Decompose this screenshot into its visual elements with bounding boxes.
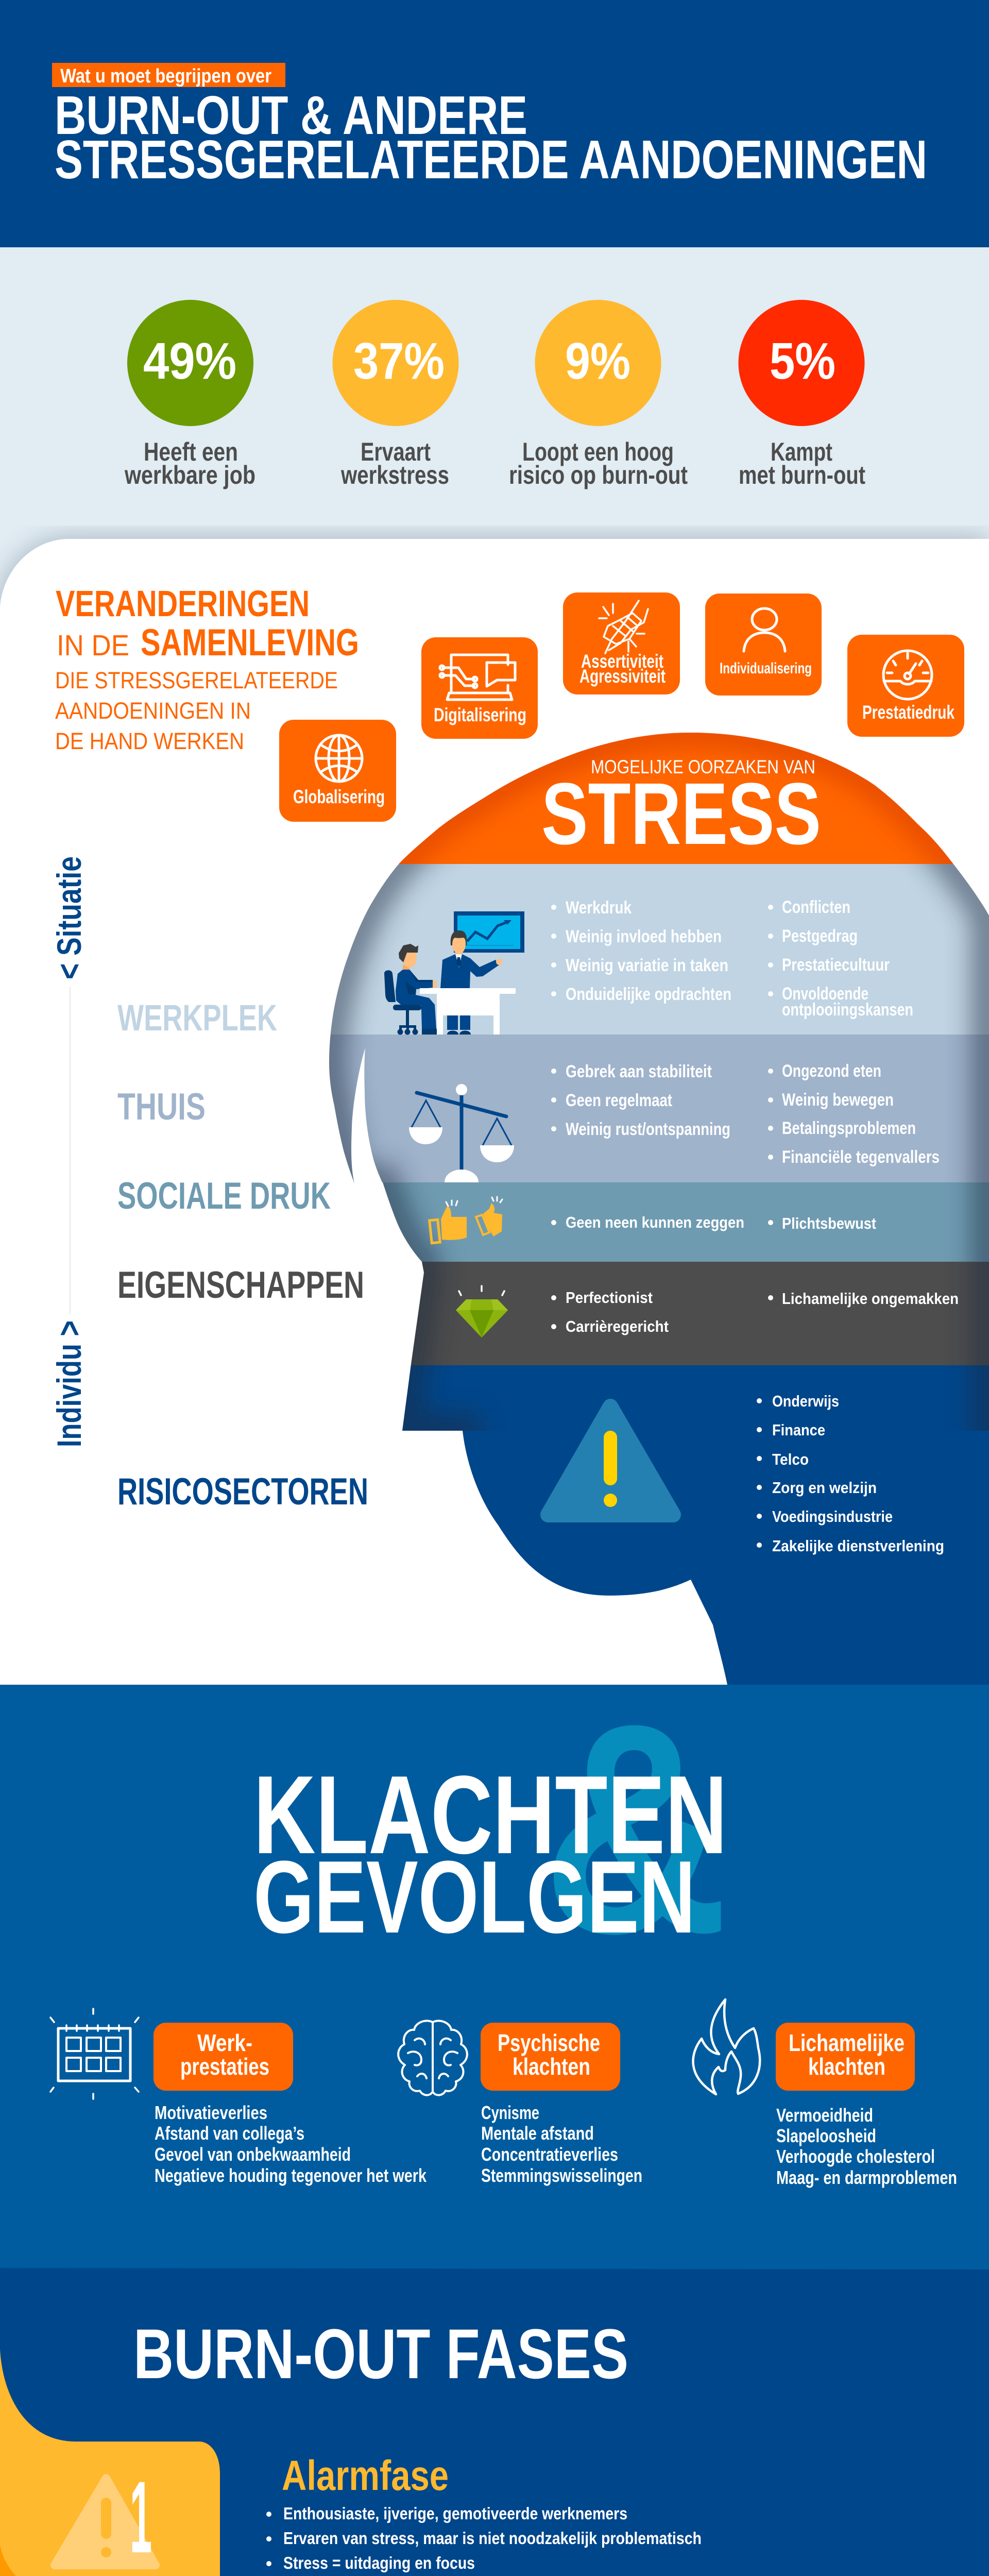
list: werkplek causes: Weinig variatie in taken bbox=[566, 956, 728, 975]
tile: digitalisering: Digitalisering bbox=[434, 704, 526, 725]
list: eigenschappen causes: Perfectionist bbox=[566, 1289, 653, 1307]
list: werkplek causes: Weinig invloed hebben bbox=[566, 927, 722, 946]
phase 1 text: Enthousiaste, ijverige, gemotiveerde werknemers bbox=[283, 2504, 627, 2523]
heading: klachten gevolgen: KLACHTEN bbox=[253, 1752, 727, 1877]
list: thuis causes: Financiële tegenvallers bbox=[782, 1147, 940, 1167]
phase 1 tab bbox=[0, 2349, 220, 2576]
phase 1 text bbox=[266, 2452, 702, 2572]
list: eigenschappen causes: Carrièregericht bbox=[566, 1317, 669, 1335]
stat: 9 percent bbox=[509, 300, 688, 489]
seated man and chair bbox=[384, 944, 437, 1035]
list: thuis causes: Geen regelmaat bbox=[566, 1091, 672, 1110]
list: werkplek causes: Onduidelijke opdrachten bbox=[566, 985, 731, 1004]
list: werkplek causes: Conflicten bbox=[782, 897, 850, 917]
list: sociale druk causes: Plichtsbewust bbox=[782, 1214, 876, 1232]
society changes text: SAMENLEVING bbox=[141, 622, 359, 664]
stat: 37 percent bbox=[333, 300, 458, 489]
header band bbox=[0, 0, 989, 247]
column: lichamelijke klachten: Slapeloosheid bbox=[776, 2125, 876, 2146]
illustration: office workers bbox=[384, 911, 524, 1035]
column: lichamelijke klachten: Lichamelijke bbox=[789, 2029, 905, 2056]
column: lichamelijke klachten: Vermoeidheid bbox=[776, 2105, 873, 2126]
stat: 37 percent: Ervaart bbox=[361, 437, 431, 466]
column: psychische klachten bbox=[398, 2021, 642, 2186]
statistics panel bbox=[0, 247, 989, 659]
icon: warning triangle bbox=[548, 1406, 673, 1515]
illustration: balance scale bbox=[409, 1084, 514, 1182]
phase 1 text: Alarmfase bbox=[282, 2452, 449, 2499]
phase 1 text: Stress = uitdaging en focus bbox=[283, 2553, 475, 2572]
icon: clasped hands bbox=[599, 601, 648, 653]
list: thuis causes bbox=[551, 1061, 940, 1167]
list: thuis causes: Betalingsproblemen bbox=[782, 1118, 916, 1138]
column: psychische klachten: Cynisme bbox=[481, 2102, 539, 2123]
burn-out phases panel bbox=[0, 2268, 989, 2576]
icon: person bbox=[744, 608, 785, 651]
icon: brain bbox=[398, 2021, 467, 2095]
list: risk sectors bbox=[757, 1392, 944, 1555]
stat: 5 percent: met burn-out bbox=[739, 461, 865, 489]
axis: situatie to individu bbox=[50, 856, 88, 1447]
icon: gauge bbox=[883, 651, 932, 699]
tile: assertiviteit agressiviteit: Assertiviteit bbox=[581, 651, 663, 672]
heading: klachten gevolgen: GEVOLGEN bbox=[253, 1840, 695, 1955]
heading: burn-out fases: BURN-OUT FASES bbox=[133, 2315, 628, 2394]
society changes text: AANDOENINGEN IN bbox=[55, 698, 251, 724]
list: risk sectors: Telco bbox=[772, 1450, 809, 1468]
column: lichamelijke klachten: Verhoogde cholesterol bbox=[776, 2146, 935, 2167]
list: risk sectors: Finance bbox=[772, 1421, 825, 1439]
tile: individualisering: Individualisering bbox=[720, 660, 812, 677]
white stress panel bbox=[0, 539, 989, 1685]
list: werkplek causes: Onvoldoende bbox=[782, 984, 868, 1004]
tile: individualisering bbox=[705, 594, 822, 696]
column: werkprestaties: Werk- bbox=[197, 2029, 252, 2056]
list: thuis causes: Gebrek aan stabiliteit bbox=[566, 1062, 712, 1081]
axis: situatie to individu: < Situatie bbox=[50, 856, 88, 979]
society changes text: DIE STRESSGERELATEERDE bbox=[55, 667, 338, 693]
list: thuis causes: Ongezond eten bbox=[782, 1061, 881, 1081]
head silhouette with stress bands bbox=[309, 721, 989, 1685]
tile: globalisering: Globalisering bbox=[293, 786, 385, 807]
list: risk sectors: Voedingsindustrie bbox=[772, 1507, 893, 1526]
stat: 9 percent: 9% bbox=[565, 332, 630, 390]
band labels: EIGENSCHAPPEN bbox=[117, 1264, 364, 1306]
complaints and consequences panel bbox=[0, 1662, 989, 2272]
desk bbox=[420, 988, 516, 1035]
stat: 5 percent: Kampt bbox=[771, 437, 832, 466]
stat: 49 percent: Heeft een bbox=[144, 437, 238, 466]
stat: 49 percent bbox=[124, 300, 255, 489]
stat: 9 percent: Loopt een hoog bbox=[522, 437, 674, 466]
society changes text: DE HAND WERKEN bbox=[55, 728, 244, 754]
tile: prestatiedruk: Prestatiedruk bbox=[862, 702, 954, 723]
standing man bbox=[440, 930, 502, 1035]
band labels: THUIS bbox=[117, 1086, 206, 1128]
stat: 49 percent: 49% bbox=[143, 332, 236, 390]
society changes text: VERANDERINGEN bbox=[56, 584, 310, 624]
icon: thumbs up bbox=[430, 1197, 502, 1243]
tile: prestatiedruk bbox=[847, 635, 964, 737]
stat: 37 percent: werkstress bbox=[340, 461, 449, 489]
column: psychische klachten: Psychische bbox=[498, 2029, 600, 2056]
column: lichamelijke klachten: klachten bbox=[808, 2053, 885, 2080]
heading: klachten gevolgen bbox=[253, 1662, 729, 1995]
list: werkplek causes bbox=[551, 897, 913, 1020]
stat: 5 percent: 5% bbox=[770, 332, 835, 390]
tile: assertiviteit agressiviteit: Agressiviteit bbox=[579, 666, 666, 687]
stress heading: STRESS bbox=[541, 765, 821, 863]
band labels bbox=[117, 998, 368, 1513]
icon: flame bbox=[693, 1999, 760, 2094]
society changes text bbox=[55, 584, 359, 754]
column: psychische klachten: Stemmingswisselingen bbox=[481, 2165, 642, 2186]
column: werkprestaties: Motivatieverlies bbox=[155, 2102, 267, 2123]
main title: BURN-OUT & ANDERE bbox=[55, 85, 527, 146]
chart board bbox=[454, 911, 524, 953]
tile: digitalisering bbox=[421, 637, 538, 739]
society changes text: IN DE bbox=[57, 629, 129, 662]
phase 1 tab: 1 bbox=[130, 2460, 152, 2574]
phase 2 tab bbox=[0, 2544, 220, 2576]
tile: globalisering bbox=[279, 720, 396, 822]
list: risk sectors: Zorg en welzijn bbox=[772, 1479, 877, 1497]
stat: 5 percent bbox=[739, 300, 865, 489]
column: psychische klachten: klachten bbox=[513, 2053, 590, 2080]
list: sociale druk causes: Geen neen kunnen zeggen bbox=[566, 1213, 744, 1231]
column: werkprestaties: prestaties bbox=[180, 2053, 269, 2080]
column: psychische klachten: Mentale afstand bbox=[481, 2123, 594, 2144]
list: werkplek causes: Pestgedrag bbox=[782, 926, 858, 946]
list: eigenschappen causes: Lichamelijke ongemakken bbox=[782, 1290, 959, 1308]
heading: klachten gevolgen: & bbox=[542, 1662, 729, 1995]
icon: diamond bbox=[456, 1286, 508, 1337]
column: werkprestaties: Gevoel van onbekwaamheid bbox=[155, 2144, 351, 2165]
stress heading: MOGELIJKE OORZAKEN VAN bbox=[591, 756, 815, 777]
axis: situatie to individu: Individu > bbox=[50, 1320, 88, 1447]
phase 1 text: Ervaren van stress, maar is niet noodzakelijk problematisch bbox=[283, 2529, 702, 2548]
band labels: RISICOSECTOREN bbox=[117, 1471, 368, 1513]
column: werkprestaties bbox=[50, 2009, 427, 2186]
icon: calendar bbox=[50, 2009, 139, 2099]
band labels: WERKPLEK bbox=[117, 998, 277, 1039]
kicker label: Wat u moet begrijpen over bbox=[60, 65, 271, 87]
stat: 9 percent: risico op burn-out bbox=[509, 461, 688, 489]
icon: device with chat bbox=[440, 655, 515, 700]
band labels: SOCIALE DRUK bbox=[117, 1175, 331, 1217]
icon: warning bbox=[55, 2478, 156, 2565]
list: eigenschappen causes bbox=[551, 1289, 959, 1335]
list: werkplek causes: Werkdruk bbox=[566, 898, 632, 918]
column: psychische klachten: Concentratieverlies bbox=[481, 2144, 618, 2165]
list: risk sectors: Zakelijke dienstverlening bbox=[772, 1537, 944, 1555]
column: werkprestaties: Negatieve houding tegenover het werk bbox=[155, 2165, 427, 2186]
list: risk sectors: Onderwijs bbox=[772, 1392, 839, 1410]
icon: globe bbox=[316, 735, 362, 782]
stat: 37 percent: 37% bbox=[353, 332, 445, 390]
main title bbox=[55, 85, 927, 190]
stat: 49 percent: werkbare job bbox=[124, 461, 255, 489]
column: lichamelijke klachten bbox=[693, 1999, 957, 2188]
tile: assertiviteit agressiviteit bbox=[563, 592, 680, 694]
list: werkplek causes: Prestatiecultuur bbox=[782, 955, 890, 975]
list: thuis causes: Weinig rust/ontspanning bbox=[566, 1120, 730, 1139]
list: sociale druk causes bbox=[551, 1213, 876, 1232]
column: werkprestaties: Afstand van collega’s bbox=[155, 2123, 304, 2144]
list: thuis causes: Weinig bewegen bbox=[782, 1090, 894, 1110]
list: werkplek causes: ontplooiingskansen bbox=[782, 1000, 913, 1020]
